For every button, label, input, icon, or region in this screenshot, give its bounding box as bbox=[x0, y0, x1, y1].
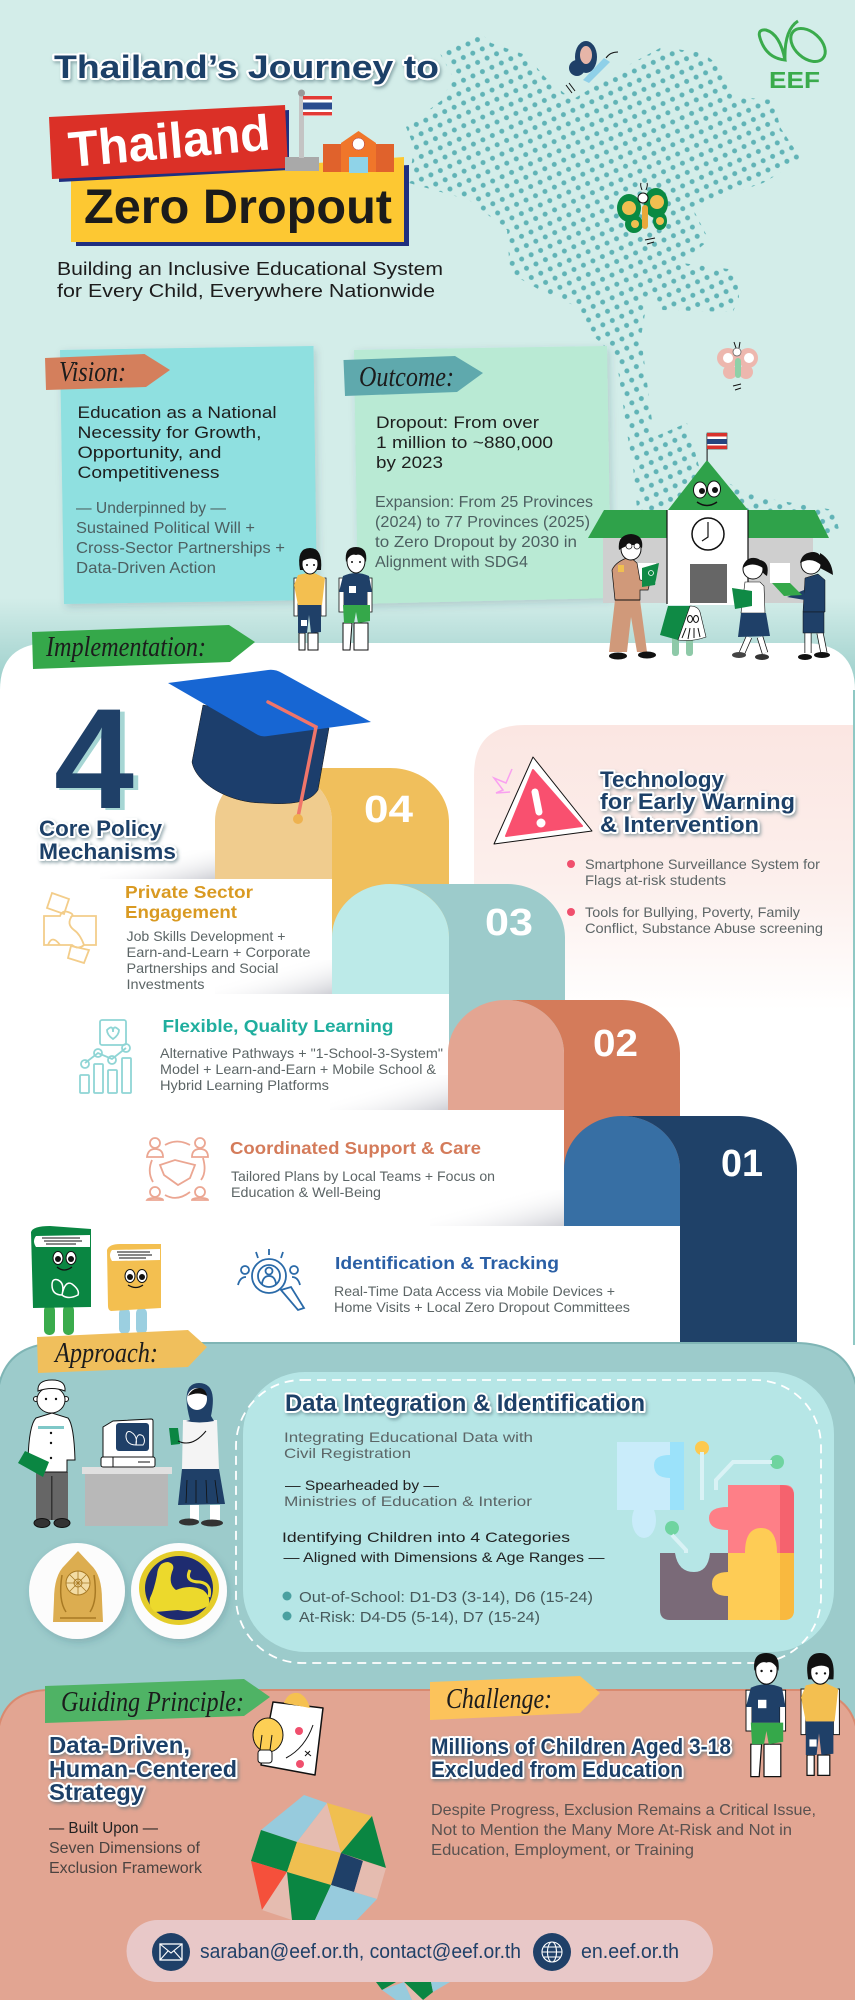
outcome expansion text bbox=[375, 494, 593, 571]
tag: Implementation: Implementation: bbox=[45, 631, 206, 663]
vision support text bbox=[76, 500, 285, 577]
icon: pink butterfly bbox=[717, 342, 758, 390]
text: identification: Real-Time Data Access via Mobile Devices + bbox=[334, 1283, 615, 1299]
icon: email bbox=[152, 1933, 190, 1971]
yellow banner: Zero Dropout bbox=[84, 181, 392, 234]
body: seven dimensions: Seven Dimensions of bbox=[49, 1840, 201, 1857]
vision support text: — Underpinned by — bbox=[76, 500, 226, 517]
body: exclusion: Despite Progress, Exclusion Remains a Critical Issue, bbox=[431, 1802, 816, 1819]
panel: technology background bbox=[474, 725, 855, 1010]
white panel shadow band bbox=[0, 598, 855, 698]
green book mascot bbox=[31, 1226, 91, 1335]
vision support text: Cross-Sector Partnerships + bbox=[76, 540, 285, 557]
body: exclusion: Not to Mention the Many More At-Risk and Not in bbox=[431, 1822, 792, 1839]
text: private sector: Earn-and-Learn + Corporate bbox=[126, 944, 311, 960]
vision statement: Necessity for Growth, bbox=[78, 423, 262, 442]
heading: Core Policy Mechanisms bbox=[39, 816, 176, 864]
icon: chart with heart bbox=[80, 1020, 131, 1093]
text: integration details: Integrating Educational Data with bbox=[284, 1429, 533, 1445]
outcome expansion text: (2024) to 77 Provinces (2025) bbox=[375, 514, 590, 531]
icon: magnifier with people bbox=[238, 1249, 304, 1310]
figure: children in challenge area bbox=[746, 1653, 839, 1777]
vision statement: Education as a National bbox=[78, 403, 276, 422]
step 04: 04 bbox=[364, 789, 413, 831]
row: coordinated support and care bbox=[147, 1138, 495, 1200]
icon: orange school bbox=[323, 131, 394, 173]
yellow banner bbox=[71, 157, 409, 246]
outcome statement: Dropout: From over bbox=[376, 413, 539, 432]
row: flexible quality learning bbox=[80, 1016, 443, 1093]
tag: Vision bbox=[45, 354, 170, 390]
text: email addresses: saraban@eef.or.th, contact@eef.or.th bbox=[200, 1941, 521, 1963]
text: coordinated support: Tailored Plans by Local Teams + Focus on bbox=[231, 1168, 495, 1184]
body: seven dimensions: — Built Upon — bbox=[49, 1820, 158, 1837]
text: integration details bbox=[282, 1429, 604, 1565]
tag: Guiding Principle bbox=[45, 1679, 270, 1723]
icon: globe bbox=[533, 1933, 571, 1971]
text: identification bbox=[334, 1253, 630, 1315]
text: guiding principle bbox=[49, 1732, 237, 1877]
body: exclusion: Education, Employment, or Training bbox=[431, 1842, 694, 1859]
icon: green butterfly bbox=[617, 183, 668, 244]
step 01: 01 bbox=[721, 1143, 763, 1185]
step 02 bbox=[448, 1000, 680, 1170]
illustration: book mascots bbox=[31, 1226, 161, 1335]
title banner: Thailand Zero Dropout bbox=[49, 90, 409, 246]
heading: data-driven strategy: Strategy bbox=[49, 1779, 144, 1805]
step 02: 02 bbox=[593, 1023, 638, 1065]
panel: technology content bbox=[494, 757, 823, 936]
bullets: technology: Conflict, Substance Abuse screening bbox=[585, 920, 823, 936]
step 03: 03 bbox=[485, 902, 533, 944]
heading: Core Policy Mechanisms: Mechanisms bbox=[39, 839, 176, 864]
heading: millions of children: Millions of Children Aged 3-18 bbox=[431, 1734, 731, 1759]
bullets: technology: Smartphone Surveillance System for bbox=[585, 856, 820, 872]
text: private sector: Investments bbox=[126, 976, 204, 992]
outcome expansion text: Expansion: From 25 Provinces bbox=[375, 494, 593, 511]
vision support text: Data-Driven Action bbox=[76, 560, 216, 577]
heading: data-driven strategy bbox=[49, 1732, 237, 1805]
icon: graduation cap bbox=[168, 670, 371, 824]
step 04 bbox=[215, 768, 449, 960]
text: challenge bbox=[431, 1734, 816, 1859]
icon: handshake and people bbox=[147, 1138, 208, 1200]
bullets: categories: Out-of-School: D1-D3 (3-14), D6 (15-24) bbox=[299, 1589, 593, 1606]
text: identification: Home Visits + Local Zero Dropout Committees bbox=[334, 1299, 630, 1315]
tag: Outcome: Outcome: bbox=[359, 361, 454, 393]
title: Thailand's Journey to: Thailand’s Journey to bbox=[54, 49, 439, 85]
panel: implementation background bbox=[0, 643, 855, 1400]
text: private sector: Partnerships and Social bbox=[126, 960, 278, 976]
icon: warning triangle bbox=[494, 757, 592, 844]
panel: vision bbox=[45, 346, 317, 604]
subtitle bbox=[57, 258, 443, 301]
heading: data-driven strategy: Human-Centered bbox=[49, 1756, 237, 1782]
bullets: technology: Flags at-risk students bbox=[585, 872, 726, 888]
illustration: school with people bbox=[588, 433, 833, 660]
text: identification: Identification & Tracking bbox=[335, 1253, 559, 1273]
text: private sector bbox=[125, 882, 311, 992]
figure: student with book bbox=[732, 558, 770, 660]
figure: two children bbox=[294, 547, 372, 650]
text: integration details: — Spearheaded by — bbox=[285, 1477, 439, 1493]
text: flexible learning bbox=[160, 1016, 443, 1093]
row: private sector engagement bbox=[44, 882, 311, 992]
vision statement bbox=[78, 403, 276, 482]
tag: Implementation bbox=[32, 625, 255, 669]
text: integration details: — Aligned with Dimensions & Age Ranges — bbox=[284, 1549, 604, 1565]
figure: man with folder bbox=[18, 1380, 75, 1528]
icon: ministry of education seal bbox=[29, 1543, 125, 1639]
outcome statement bbox=[376, 413, 553, 472]
red banner: Thailand bbox=[66, 105, 272, 178]
outcome expansion text: to Zero Dropout by 2030 in bbox=[375, 534, 577, 551]
text: integration details: Ministries of Education & Interior bbox=[284, 1493, 532, 1509]
text: coordinated support: Coordinated Support & Care bbox=[230, 1138, 481, 1158]
vision statement: Competitiveness bbox=[78, 463, 220, 482]
big number 4: 4 bbox=[57, 682, 139, 841]
text: website: en.eef.or.th bbox=[581, 1941, 679, 1963]
icon: puzzle bbox=[44, 893, 96, 963]
logo: EEF: EEF bbox=[769, 67, 820, 93]
school building bbox=[588, 433, 829, 605]
subtitle: Building an Inclusive Educational System bbox=[57, 258, 443, 279]
body: exclusion bbox=[431, 1802, 816, 1859]
bullets: technology: Tools for Bullying, Poverty, Family bbox=[585, 904, 800, 920]
heading: Technology for Early Warning & Intervention: for Early Warning bbox=[600, 789, 795, 814]
row: identification and tracking bbox=[238, 1249, 630, 1315]
outcome expansion text: Alignment with SDG4 bbox=[375, 554, 528, 571]
text: private sector: Private Sector bbox=[125, 882, 253, 902]
heading: data integration: Data Integration & Identification bbox=[285, 1390, 645, 1417]
heading: Technology for Early Warning & Intervention: & Intervention bbox=[600, 812, 759, 837]
body: seven dimensions bbox=[49, 1820, 203, 1877]
heading: millions of children bbox=[431, 1734, 731, 1782]
tag: Challenge bbox=[430, 1676, 600, 1720]
figure: woman with hijab bbox=[169, 1383, 225, 1526]
tag: Approach bbox=[37, 1330, 207, 1373]
text: coordinated support bbox=[230, 1138, 495, 1200]
outcome statement: by 2023 bbox=[376, 453, 443, 472]
panel: approach background bbox=[0, 1343, 855, 1800]
logo: EEF bbox=[759, 21, 832, 93]
outcome statement: 1 million to ~880,000 bbox=[376, 433, 553, 452]
panel: outcome bbox=[344, 346, 611, 604]
tag: Vision: Vision: bbox=[59, 356, 126, 388]
text: integration details: Identifying Children into 4 Categories bbox=[282, 1529, 570, 1545]
big number 4: 4 bbox=[54, 680, 134, 839]
heading: millions of children: Excluded from Education bbox=[431, 1757, 683, 1782]
bullets: categories bbox=[282, 1589, 593, 1626]
subtitle: for Every Child, Everywhere Nationwide bbox=[57, 280, 435, 301]
bullets: technology bbox=[567, 856, 823, 936]
dotted map of Thailand bbox=[406, 32, 840, 600]
icon: flag and pole bbox=[285, 90, 332, 171]
heading: Technology for Early Warning & Intervention: Technology bbox=[600, 767, 725, 792]
tag: Challenge: Challenge: bbox=[446, 1683, 552, 1715]
text: coordinated support: Education & Well-Being bbox=[231, 1184, 381, 1200]
figure: teacher in brown uniform bbox=[609, 534, 659, 660]
figure: book mascot bbox=[660, 606, 706, 656]
icon: ministry of interior seal bbox=[131, 1543, 227, 1639]
tag: Guiding Principle: Guiding Principle: bbox=[61, 1686, 244, 1718]
tag: Approach: Approach: bbox=[53, 1337, 158, 1369]
heading: data-driven strategy: Data-Driven, bbox=[49, 1732, 190, 1758]
text: private sector: Job Skills Development + bbox=[126, 928, 286, 944]
text: flexible learning: Hybrid Learning Platforms bbox=[160, 1077, 329, 1093]
text: flexible learning: Flexible, Quality Learning bbox=[162, 1016, 394, 1036]
yellow book mascot bbox=[107, 1244, 161, 1334]
icon: navy butterfly bbox=[566, 41, 618, 93]
text: flexible learning: Model + Learn-and-Earn + Mobile School & bbox=[160, 1061, 437, 1077]
vision support text: Sustained Political Will + bbox=[76, 520, 255, 537]
panel: data integration and identification bbox=[236, 1372, 834, 1663]
contact pill bbox=[126, 1920, 713, 1982]
panel: guiding principle and challenge background bbox=[0, 1690, 855, 2000]
figure: teacher in navy suit bbox=[772, 552, 833, 660]
icon: puzzle pieces bbox=[617, 1441, 794, 1620]
text: flexible learning: Alternative Pathways + "1-School-3-System" bbox=[160, 1045, 443, 1061]
vision statement: Opportunity, and bbox=[78, 443, 222, 462]
step 03 bbox=[332, 884, 565, 1050]
tag: Outcome bbox=[344, 356, 483, 396]
body: seven dimensions: Exclusion Framework bbox=[49, 1860, 203, 1877]
graphic: mosaic kite bbox=[251, 1795, 450, 2000]
heading: Core Policy Mechanisms: Core Policy bbox=[39, 816, 163, 841]
step 01 bbox=[564, 1116, 797, 1348]
text: private sector: Engagement bbox=[125, 902, 237, 922]
text: integration details: Civil Registration bbox=[284, 1445, 411, 1461]
bullets: categories: At-Risk: D4-D5 (5-14), D7 (15-24) bbox=[299, 1609, 540, 1626]
icon: clipboard and light bulb bbox=[253, 1693, 323, 1775]
heading: Technology for Early Warning & Intervention bbox=[600, 767, 795, 837]
figure: desk with computer bbox=[82, 1419, 172, 1526]
